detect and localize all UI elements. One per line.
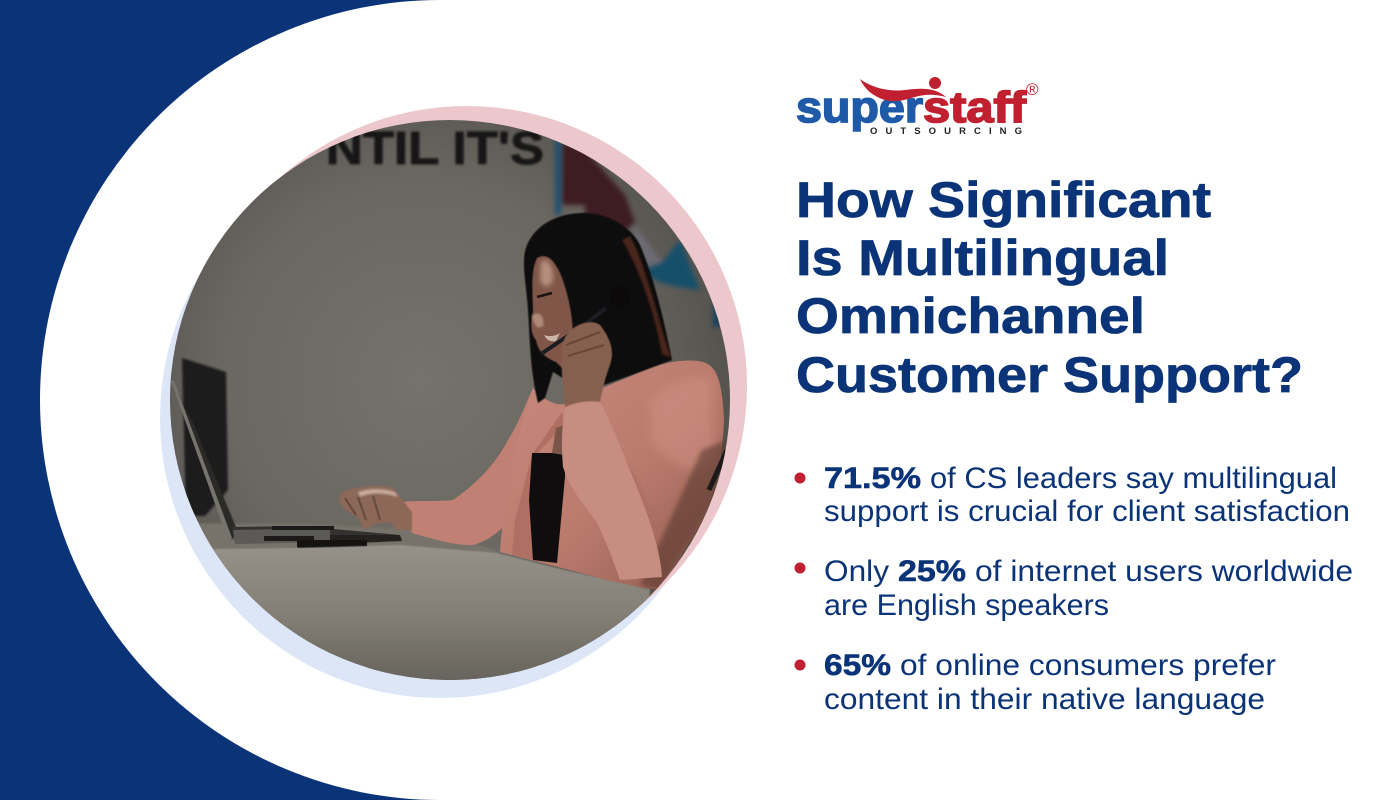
back of desk — [170, 523, 500, 600]
desk surface — [214, 544, 650, 680]
statistic: 71.5% — [824, 462, 921, 495]
raised sleeve — [562, 401, 662, 580]
bullet — [794, 472, 806, 484]
reaching arm — [402, 388, 545, 545]
sign on wall: NTIL IT'S — [326, 122, 544, 174]
text: of CS leaders say multilingual — [930, 462, 1337, 495]
headset — [541, 308, 606, 354]
statistic: 65% — [824, 649, 891, 682]
stat 3: 65% of online consumers — [794, 649, 1276, 716]
decorative circle: pink backing — [187, 106, 747, 666]
blazer body — [500, 360, 728, 590]
text — [824, 555, 1353, 622]
black top — [529, 453, 565, 563]
logo wordmark — [796, 83, 1026, 132]
text: of online consumers prefer — [900, 649, 1276, 682]
shoulder highlight — [650, 376, 716, 470]
logo wordmark: super — [796, 83, 923, 132]
bullet — [794, 562, 806, 574]
decorative circle: light blue backing — [160, 138, 720, 698]
text: of internet users worldwide — [975, 555, 1353, 588]
text: content in their native language — [824, 683, 1265, 716]
logo registered mark: ® — [1026, 80, 1039, 99]
statistic: 25% — [898, 555, 966, 588]
text: are English speakers — [824, 589, 1109, 622]
logo dot — [929, 77, 941, 89]
title — [796, 172, 1303, 403]
logo tagline: OUTSOURCING — [870, 126, 1022, 137]
keyboard hand — [339, 486, 412, 530]
dark monitor — [182, 358, 228, 516]
laptop — [171, 381, 402, 548]
logo: superstaff outsourcing — [796, 77, 1039, 137]
back shadow — [640, 440, 728, 590]
title: Omnichannel — [796, 288, 1145, 344]
lead word: Only — [824, 555, 889, 588]
forearm shadow side — [629, 467, 641, 492]
logo wordmark: staff — [923, 83, 1026, 132]
title: Customer Support? — [796, 347, 1303, 403]
face — [531, 256, 573, 372]
text — [824, 649, 1276, 716]
title: How Significant — [796, 172, 1211, 228]
text: support is crucial for client satisfaction — [824, 495, 1350, 528]
photo: woman with headset working at a laptop — [170, 120, 730, 700]
hair — [524, 213, 672, 403]
blurred wall logo — [555, 140, 722, 328]
stat 2: 25% of internet users — [794, 555, 1353, 622]
strap — [709, 450, 727, 490]
bullet — [794, 660, 806, 670]
raised hand — [562, 322, 612, 407]
stat 1: 71.5% of CS leaders — [794, 462, 1350, 528]
text — [824, 462, 1350, 528]
neck — [552, 425, 563, 454]
lapel — [512, 412, 565, 560]
logo swoosh — [860, 79, 946, 101]
title: Is Multilingual — [796, 230, 1169, 286]
